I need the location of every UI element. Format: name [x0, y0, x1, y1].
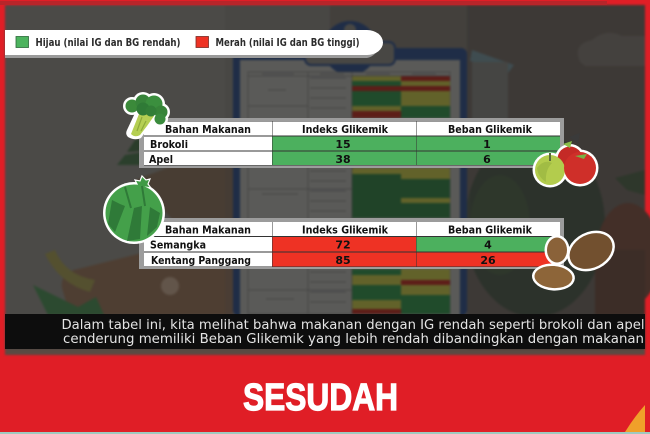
legend text: hijau: Hijau (nilai IG dan BG rendah) — [36, 37, 180, 49]
table: low glycemic foods: Beban Glikemik — [448, 123, 533, 136]
table: low glycemic foods: 6 — [483, 153, 491, 166]
table: high glycemic foods: Bahan Makanan — [165, 224, 251, 236]
table: low glycemic foods: 15 — [335, 138, 351, 151]
table: high glycemic foods: 26 — [480, 254, 496, 267]
icon: broccoli — [123, 92, 170, 139]
icon: apples — [532, 133, 598, 188]
caption text: Dalam tabel ini, kita melihat bahwa makanan dengan IG rendah seperti brokoli dan apel — [62, 318, 644, 333]
legend swatch: hijau — [16, 36, 28, 48]
table: low glycemic foods: 1 — [483, 138, 491, 151]
red top band — [0, 1, 607, 5]
table: low glycemic foods: Indeks Glikemik — [302, 123, 389, 136]
table: low glycemic foods — [139, 118, 564, 168]
tomato right — [596, 203, 650, 307]
table: high glycemic foods: Indeks Glikemik — [302, 224, 389, 236]
glass — [470, 50, 514, 73]
table: high glycemic foods: 85 — [335, 254, 351, 267]
table: high glycemic foods — [139, 218, 564, 269]
dark green blob — [465, 133, 605, 317]
orange corner accent — [625, 405, 645, 432]
icon: watermelon — [103, 176, 165, 244]
table: high glycemic foods: Beban Glikemik — [448, 224, 533, 236]
table: low glycemic foods: Apel — [149, 153, 173, 166]
table: low glycemic foods: Bahan Makanan — [165, 123, 251, 136]
table: high glycemic foods: 72 — [335, 238, 351, 252]
table: high glycemic foods: 4 — [484, 238, 492, 252]
caption text: cenderung memiliki Beban Glikemik yang lebih rendah dibandingkan dengan makanan — [63, 332, 644, 347]
cloud right — [578, 33, 645, 66]
table: low glycemic foods: 38 — [335, 153, 351, 166]
legend bar — [5, 30, 383, 58]
icon: potatoes — [531, 223, 622, 292]
table: high glycemic foods: Kentang Panggang — [151, 254, 251, 267]
table: high glycemic foods: Semangka — [150, 238, 206, 252]
clipboard — [233, 48, 467, 316]
background table — [248, 72, 450, 314]
left food shapes — [135, 160, 233, 220]
bottom teal line — [0, 432, 650, 434]
caption text — [62, 318, 644, 347]
table: low glycemic foods: Brokoli — [150, 138, 188, 151]
title: SESUDAH — [243, 377, 398, 419]
legend text: merah: Merah (nilai IG dan BG tinggi) — [216, 37, 360, 49]
caption box — [5, 314, 645, 349]
legend swatch: merah — [196, 36, 208, 48]
